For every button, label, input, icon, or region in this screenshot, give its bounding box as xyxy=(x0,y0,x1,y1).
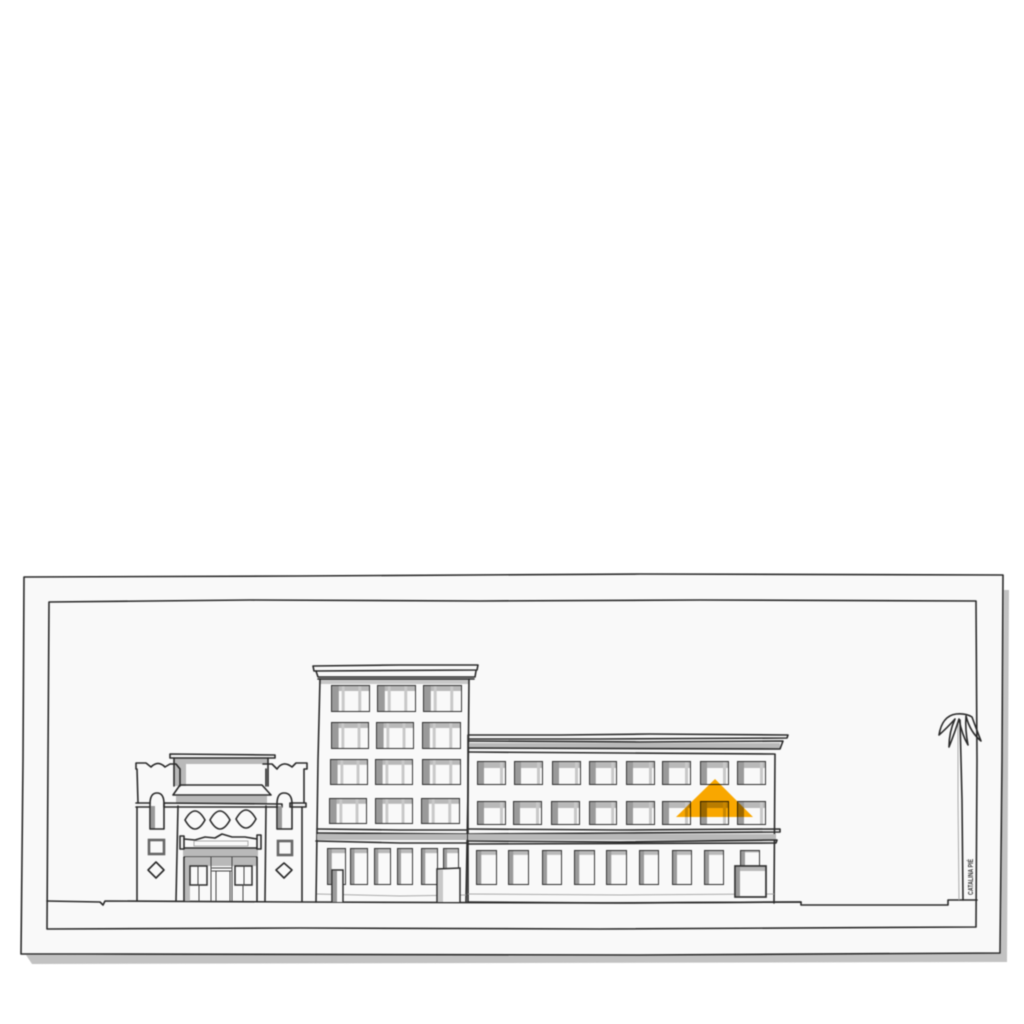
cornice roof xyxy=(173,785,271,795)
diamond ornaments xyxy=(148,810,292,878)
office entrance box xyxy=(735,866,766,897)
palm tree xyxy=(939,714,981,900)
paper shadow xyxy=(26,590,1009,964)
inner frame xyxy=(47,600,977,929)
marquee sign xyxy=(180,834,261,849)
square windows xyxy=(149,840,292,855)
tower ground floor windows xyxy=(327,848,459,885)
icon: orange triangle xyxy=(676,779,753,817)
tower windows xyxy=(329,685,462,824)
entrance xyxy=(184,857,257,901)
office upper windows xyxy=(477,761,766,825)
office ground floor windows xyxy=(476,850,760,885)
building: tower xyxy=(313,665,478,902)
building: long office block xyxy=(468,734,801,903)
framed card xyxy=(21,574,1003,955)
ground line xyxy=(47,900,977,905)
building: theatre xyxy=(136,754,307,901)
signature: CATALINA PIÉ xyxy=(966,859,975,895)
arched windows xyxy=(150,793,292,829)
tower doors xyxy=(332,868,460,902)
